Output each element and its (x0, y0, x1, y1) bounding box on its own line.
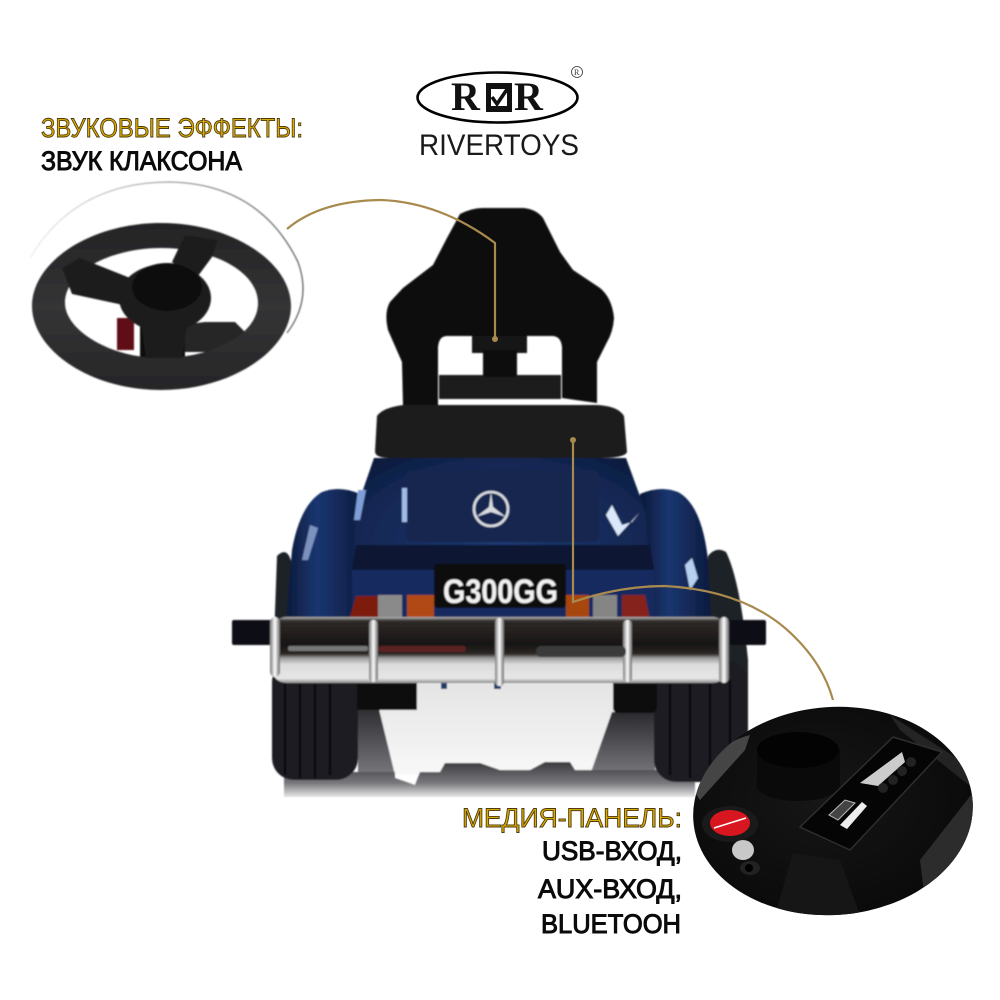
toy car photo (232, 208, 766, 797)
seat back post (439, 336, 561, 399)
red power switch (702, 806, 758, 842)
side steps (232, 620, 766, 645)
logo: Rivertoys (418, 66, 582, 162)
text: media panel features: AUX-ВХОД, (538, 874, 682, 904)
steering wheel rim (32, 223, 291, 390)
seat cushion (375, 405, 627, 458)
gloss (693, 715, 975, 915)
inset: media panel (690, 700, 980, 920)
logo: Rivertoys: R (451, 74, 481, 119)
logo: Rivertoys: R (514, 74, 544, 119)
heading: sound effects (41, 113, 303, 176)
license plate (434, 564, 566, 611)
undercarriage (357, 677, 657, 713)
emblem (474, 492, 508, 526)
license plate: G300GG (443, 573, 558, 611)
chrome bumper (270, 617, 729, 686)
callout line: media panel (570, 437, 833, 700)
charging plug (732, 840, 760, 875)
steering wheel spokes (62, 235, 218, 358)
floor reflection (284, 683, 695, 797)
knob cylinder (756, 732, 840, 801)
steering column background (117, 318, 248, 363)
taillights (349, 595, 650, 620)
horn button (132, 263, 202, 311)
fenders (285, 489, 712, 632)
inset: steering wheel (30, 182, 303, 390)
usb port (829, 800, 867, 829)
seat back (386, 208, 614, 405)
rear wheels (272, 550, 748, 782)
text: media panel features: BLUETOOH (541, 909, 681, 939)
text: media panel features: USB-ВХОД, (542, 836, 682, 866)
heading: sound effects: ЗВУК КЛАКСОНА (41, 146, 242, 176)
logo: Rivertoys: R (574, 68, 580, 77)
body (350, 458, 655, 632)
logo: Rivertoys: RIVERTOYS (419, 129, 579, 162)
text: media panel features: МЕДИЯ-ПАНЕЛЬ: (462, 803, 682, 833)
control plate (800, 737, 942, 850)
callout line: horn (287, 200, 498, 342)
text: media panel features (462, 803, 682, 939)
equalizer graphic and buttons (860, 752, 916, 793)
heading: sound effects: ЗВУКОВЫЕ ЭФФЕКТЫ: (41, 113, 303, 143)
